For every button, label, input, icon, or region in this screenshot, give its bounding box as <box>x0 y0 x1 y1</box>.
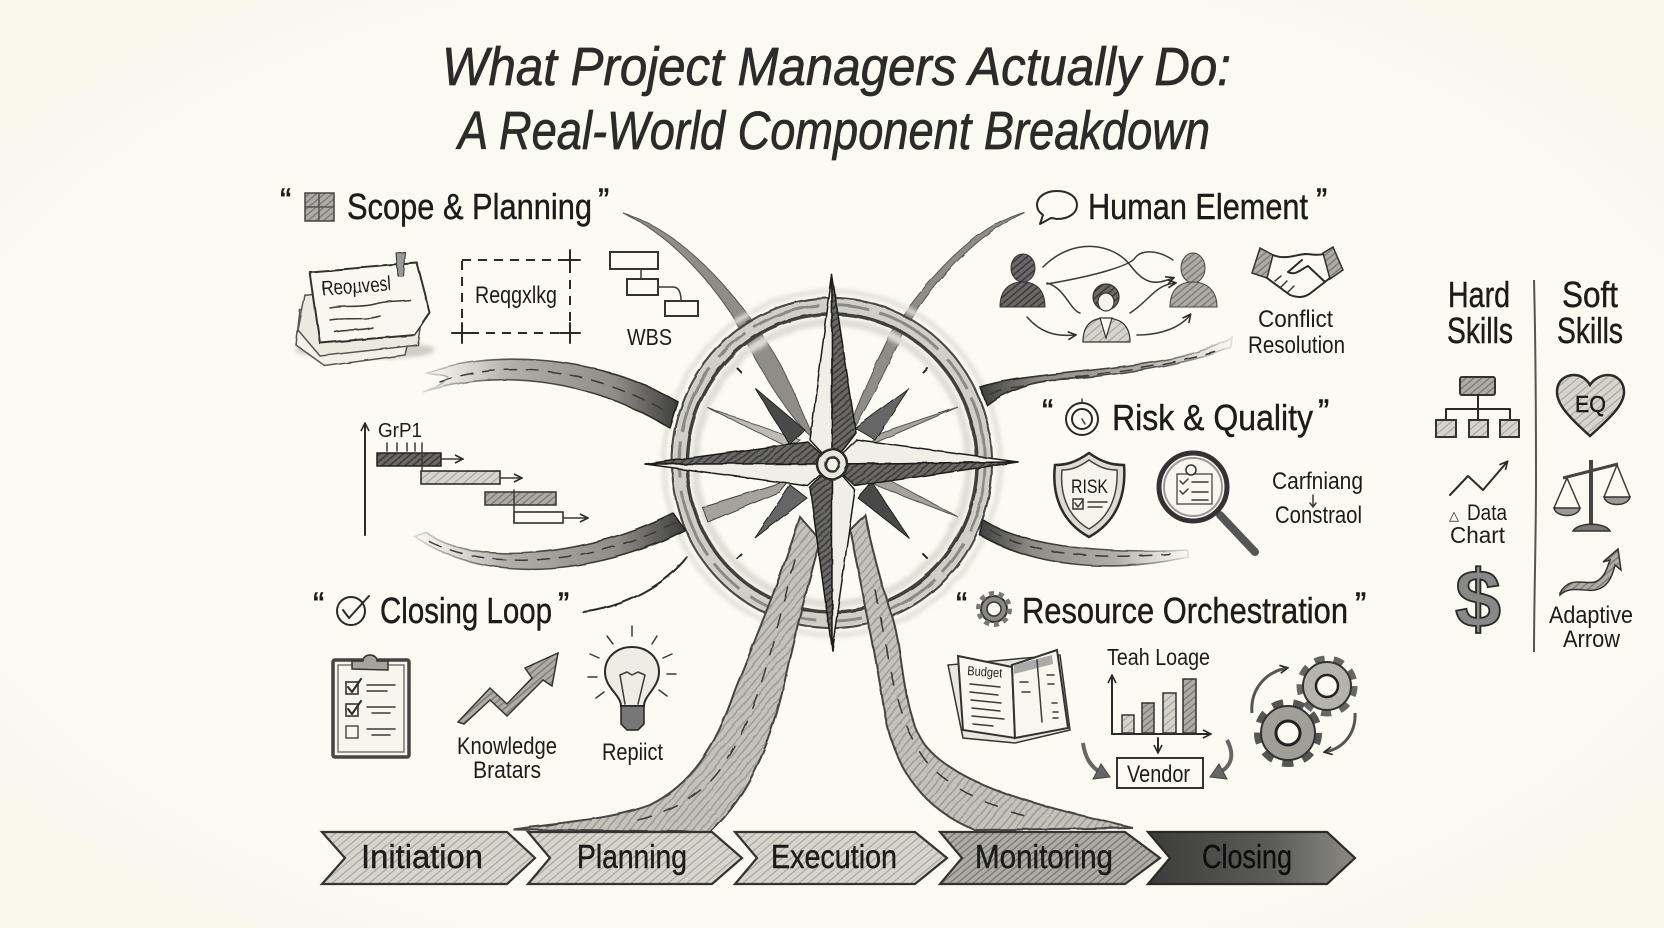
chart: team load <box>1107 644 1210 752</box>
icon: balance scales <box>1554 460 1630 531</box>
person: right <box>1170 253 1217 307</box>
icon: rising arrow <box>458 653 558 724</box>
label: carfniang constraol <box>1272 468 1363 529</box>
road: to monitoring <box>850 515 1133 830</box>
icon: org chart <box>1436 377 1519 437</box>
gear: upper <box>1300 659 1354 713</box>
heading: closing loop: ” <box>558 586 569 624</box>
chart: team load: Teah Loage <box>1107 644 1210 670</box>
heading: closing loop <box>313 586 569 631</box>
heading: resource orchestration: “ <box>956 586 967 624</box>
icon: stakeholder network <box>1000 246 1217 342</box>
label: data chart: △ <box>1449 508 1459 523</box>
road: bottom left <box>414 513 685 569</box>
title <box>442 37 1231 161</box>
label: data chart: Chart <box>1450 522 1506 548</box>
stage: planning <box>528 832 742 884</box>
person: centre <box>1083 284 1130 342</box>
road: to planning <box>513 517 820 832</box>
label: knowledge bratars: Knowledge <box>457 733 557 760</box>
panel: risk and quality <box>1042 393 1363 552</box>
heading: hard skills <box>1447 274 1513 351</box>
stage: monitoring: Monitoring <box>975 838 1113 875</box>
stage: closing: Closing <box>1202 838 1292 875</box>
icon: risk shield <box>1054 453 1124 537</box>
label: repiict: Repiict <box>602 739 663 766</box>
label: knowledge bratars <box>457 733 557 784</box>
compass star <box>645 275 1018 650</box>
panel: scope and planning <box>280 182 698 535</box>
icon: scope dashed box <box>452 250 580 343</box>
icon: budget book <box>948 650 1070 743</box>
road: top right <box>980 337 1232 405</box>
chart: gantt <box>365 420 587 535</box>
icon: risk shield: RISK <box>1071 477 1108 498</box>
panel: project stages <box>322 832 1355 884</box>
icon: gears <box>1252 659 1355 763</box>
stage: execution <box>735 832 947 884</box>
heading: scope and planning: “ <box>280 182 291 220</box>
heading: risk and quality: ” <box>1318 393 1329 431</box>
icon: request note stack <box>295 252 435 366</box>
heading: risk and quality: Risk & Quality <box>1112 397 1313 438</box>
icon: budget book: Budget <box>967 663 1003 680</box>
heading: human element: ” <box>1316 182 1327 220</box>
heading: scope and planning: ” <box>598 182 609 220</box>
heading: soft skills: Skills <box>1557 310 1623 351</box>
icon: request note stack: Reoµvesl <box>321 273 392 300</box>
compass ring <box>664 291 1000 635</box>
label: carfniang constraol: Constraol <box>1275 502 1362 529</box>
stage: execution: Execution <box>771 838 897 875</box>
panel: resource orchestration <box>948 586 1366 788</box>
label: adaptive arrow: Arrow <box>1563 626 1621 653</box>
label: adaptive arrow: Adaptive <box>1549 602 1633 629</box>
heading: risk and quality: “ <box>1042 393 1053 431</box>
heading: resource orchestration: Resource Orchestration <box>1022 590 1348 631</box>
icon: WBS <box>610 252 698 350</box>
person: left <box>1000 254 1045 307</box>
compass diagonal points <box>755 388 909 538</box>
icon: dollar: $ <box>1455 554 1501 645</box>
icon: clipboard checklist <box>333 655 409 757</box>
stage: planning: Planning <box>577 838 687 875</box>
label: adaptive arrow <box>1549 602 1633 653</box>
heading: closing loop: Closing Loop <box>380 590 552 631</box>
panel: human element <box>1000 182 1345 359</box>
icon: adaptive arrow <box>1560 549 1621 595</box>
panel: closing loop <box>313 586 676 784</box>
label: conflict resolution: Conflict <box>1258 306 1333 333</box>
label: conflict resolution <box>1248 306 1345 359</box>
heading: risk and quality <box>1042 393 1329 438</box>
heading: resource orchestration: ” <box>1355 586 1366 624</box>
label: conflict resolution: Resolution <box>1248 332 1345 359</box>
panel: soft skills <box>1549 274 1633 653</box>
label: knowledge bratars: Bratars <box>473 757 541 784</box>
label: data chart: Data <box>1467 500 1508 525</box>
stage: closing <box>1148 832 1355 884</box>
box: vendor: Vendor <box>1127 761 1190 788</box>
icon: line chart <box>1450 462 1507 495</box>
arrow: right to vendor <box>1210 740 1231 779</box>
chart: gantt: GrP1 <box>378 420 422 442</box>
label: data chart <box>1449 500 1508 548</box>
heading: hard skills: Skills <box>1447 310 1513 351</box>
divider: hard and soft skills <box>1534 280 1536 652</box>
panel: hard skills <box>1436 274 1519 645</box>
road: top left <box>423 359 678 428</box>
icon: magnifier checklist <box>1159 453 1255 552</box>
compass <box>414 275 1232 832</box>
icon: scope dashed box: Reqgxlkg <box>475 282 557 309</box>
heading: scope and planning <box>280 182 609 227</box>
stage: initiation <box>322 832 535 884</box>
sweeping pencil curves into compass <box>583 212 1024 612</box>
label: carfniang constraol: Carfniang <box>1272 468 1363 495</box>
icon: EQ heart <box>1557 375 1624 436</box>
compass spokes <box>702 407 958 522</box>
compass hub <box>817 449 847 479</box>
icon: WBS: WBS <box>627 324 672 350</box>
heading: soft skills <box>1557 274 1623 351</box>
gear: lower <box>1258 703 1318 763</box>
title: What Project Managers Actually Do: <box>442 37 1231 97</box>
heading: hard skills: Hard <box>1448 274 1510 315</box>
icon: lightbulb <box>588 626 676 730</box>
icon: handshake <box>1252 247 1343 297</box>
heading: human element: Human Element <box>1088 186 1308 227</box>
heading: closing loop: “ <box>313 586 324 624</box>
stage: monitoring <box>940 832 1160 884</box>
arrow: left to vendor <box>1083 743 1110 779</box>
icon: EQ heart: EQ <box>1575 391 1606 417</box>
title: A Real-World Component Breakdown <box>455 101 1210 161</box>
road: bottom right <box>980 520 1188 566</box>
heading: soft skills: Soft <box>1562 274 1618 315</box>
heading: scope and planning: Scope & Planning <box>347 186 592 227</box>
stage: initiation: Initiation <box>361 838 483 875</box>
